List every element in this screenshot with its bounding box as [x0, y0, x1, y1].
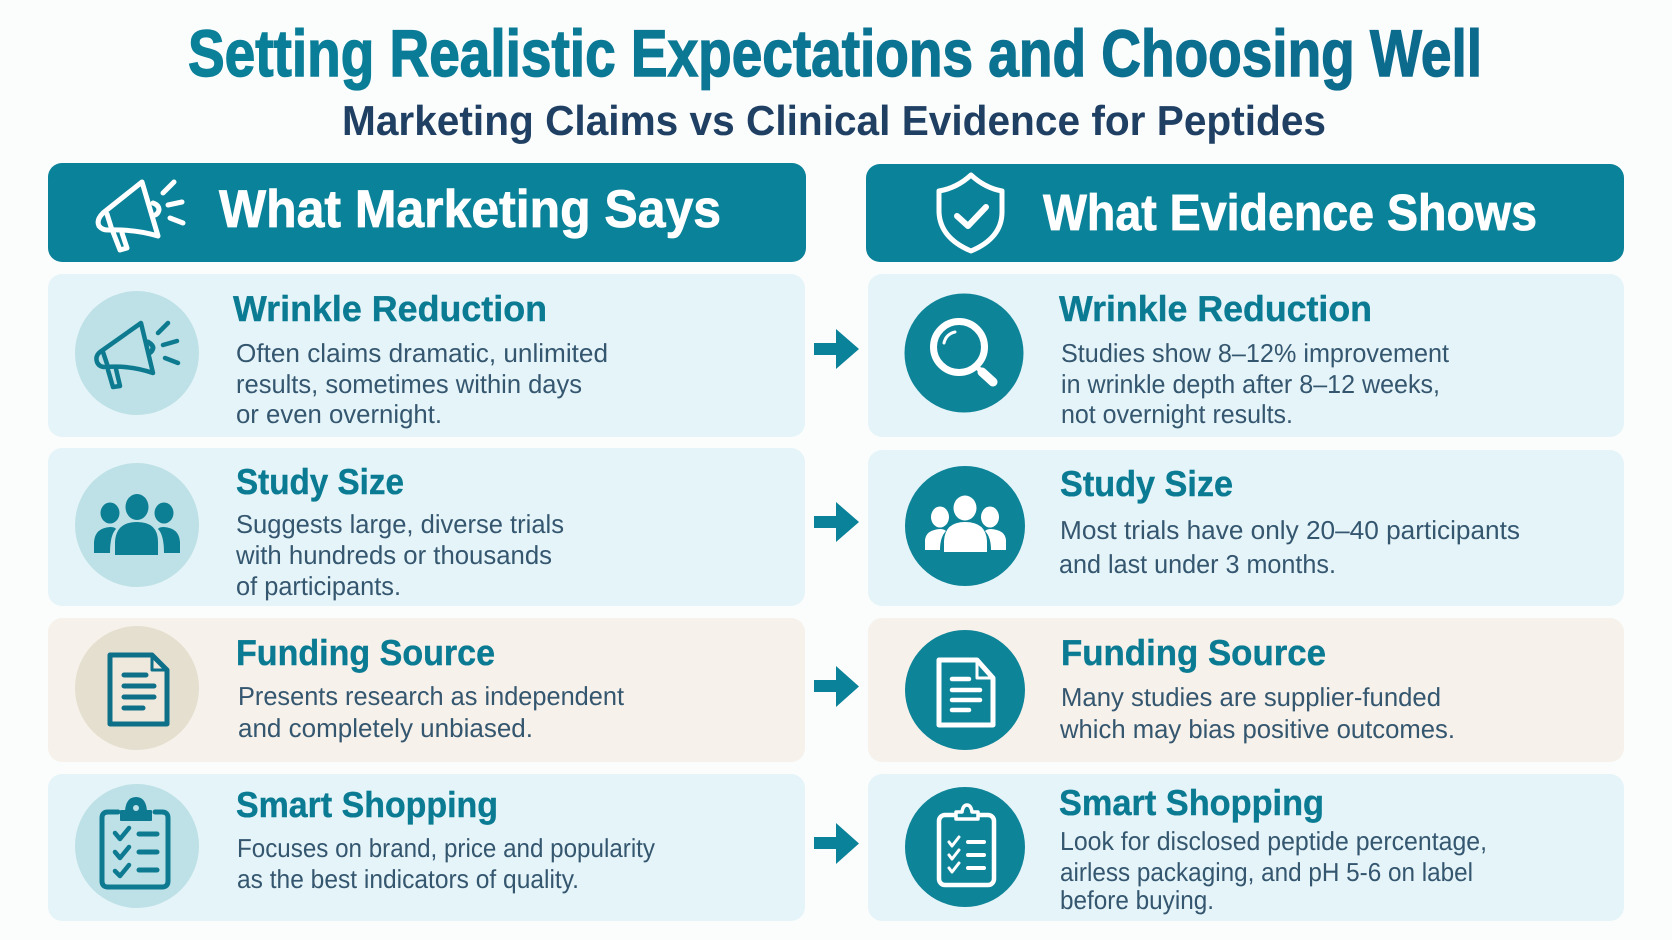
row 2 left: Study Size marketing claim: [48, 448, 805, 606]
icon: clipboard in circle: [905, 787, 1025, 907]
icon: megaphone: [98, 182, 183, 250]
card body text: not overnight results.: [1061, 399, 1293, 429]
card heading: Study Size: [1060, 463, 1233, 504]
card body text: [238, 681, 625, 743]
icon: people in circle: [905, 466, 1025, 586]
card body text: [1061, 338, 1450, 429]
card body text: which may bias positive outcomes.: [1059, 714, 1455, 744]
heading text: What Evidence Shows: [1043, 184, 1537, 241]
card body text: Suggests large, diverse trials: [236, 509, 564, 539]
card heading: Funding Source: [236, 632, 495, 673]
row 3 right: Funding Source evidence: [868, 618, 1624, 762]
card heading: Smart Shopping: [1059, 782, 1324, 823]
icon: clipboard in circle: [75, 784, 199, 908]
card body text: [235, 509, 564, 601]
card body text: or even overnight.: [236, 399, 442, 429]
icon: megaphone in circle: [75, 291, 199, 415]
row 4 arrow: [814, 823, 859, 864]
icon: document in circle: [905, 630, 1025, 750]
row 2 arrow: [814, 502, 859, 542]
icon: shield with check: [939, 175, 1002, 251]
row 1 right: Wrinkle Reduction evidence: [868, 274, 1624, 437]
column header: What Evidence Shows: [866, 164, 1624, 262]
row 4 left: Smart Shopping marketing claim: [48, 774, 805, 921]
card body text: [237, 833, 655, 894]
card heading: Study Size: [236, 461, 404, 502]
card body text: Presents research as independent: [238, 681, 625, 711]
card body text: [1059, 682, 1455, 744]
row 1 arrow: [814, 329, 859, 369]
card body text: of participants.: [236, 571, 401, 601]
row 3 left: Funding Source marketing claim: [48, 618, 805, 762]
card body text: [1059, 515, 1520, 579]
card body text: [1060, 826, 1487, 915]
card heading: Wrinkle Reduction: [1059, 288, 1372, 329]
icon: document in circle: [75, 626, 199, 750]
card body text: Often claims dramatic, unlimited: [236, 338, 608, 368]
card body text: Look for disclosed peptide percentage,: [1060, 826, 1487, 856]
card body text: in wrinkle depth after 8–12 weeks,: [1061, 369, 1440, 399]
row 1 left: Wrinkle Reduction marketing claim: [48, 274, 805, 437]
card body text: results, sometimes within days: [236, 369, 582, 399]
row 3 arrow: [814, 666, 859, 707]
card body text: [236, 338, 608, 429]
icon: people in circle: [75, 463, 199, 587]
card heading: Wrinkle Reduction: [233, 288, 547, 329]
card body text: before buying.: [1060, 885, 1214, 915]
icon: magnifying glass in circle: [904, 294, 1024, 412]
card body text: with hundreds or thousands: [235, 540, 552, 570]
card heading: Smart Shopping: [236, 784, 498, 825]
heading text: What Marketing Says: [219, 180, 721, 239]
card body text: Most trials have only 20–40 participants: [1060, 515, 1520, 545]
card body text: as the best indicators of quality.: [237, 864, 579, 894]
row 2 right: Study Size evidence: [868, 450, 1624, 606]
subtitle: Marketing Claims vs Clinical Evidence for Peptides: [342, 97, 1326, 144]
column header: What Marketing Says: [48, 163, 806, 262]
card body text: Studies show 8–12% improvement: [1061, 338, 1450, 368]
card heading: Funding Source: [1061, 632, 1326, 673]
row 4 right: Smart Shopping evidence: [868, 774, 1624, 921]
card body text: and last under 3 months.: [1059, 549, 1336, 579]
card body text: airless packaging, and pH 5-6 on label: [1060, 857, 1473, 887]
card body text: Focuses on brand, price and popularity: [237, 833, 655, 863]
card body text: Many studies are supplier-funded: [1061, 682, 1441, 712]
card body text: and completely unbiased.: [238, 713, 533, 743]
